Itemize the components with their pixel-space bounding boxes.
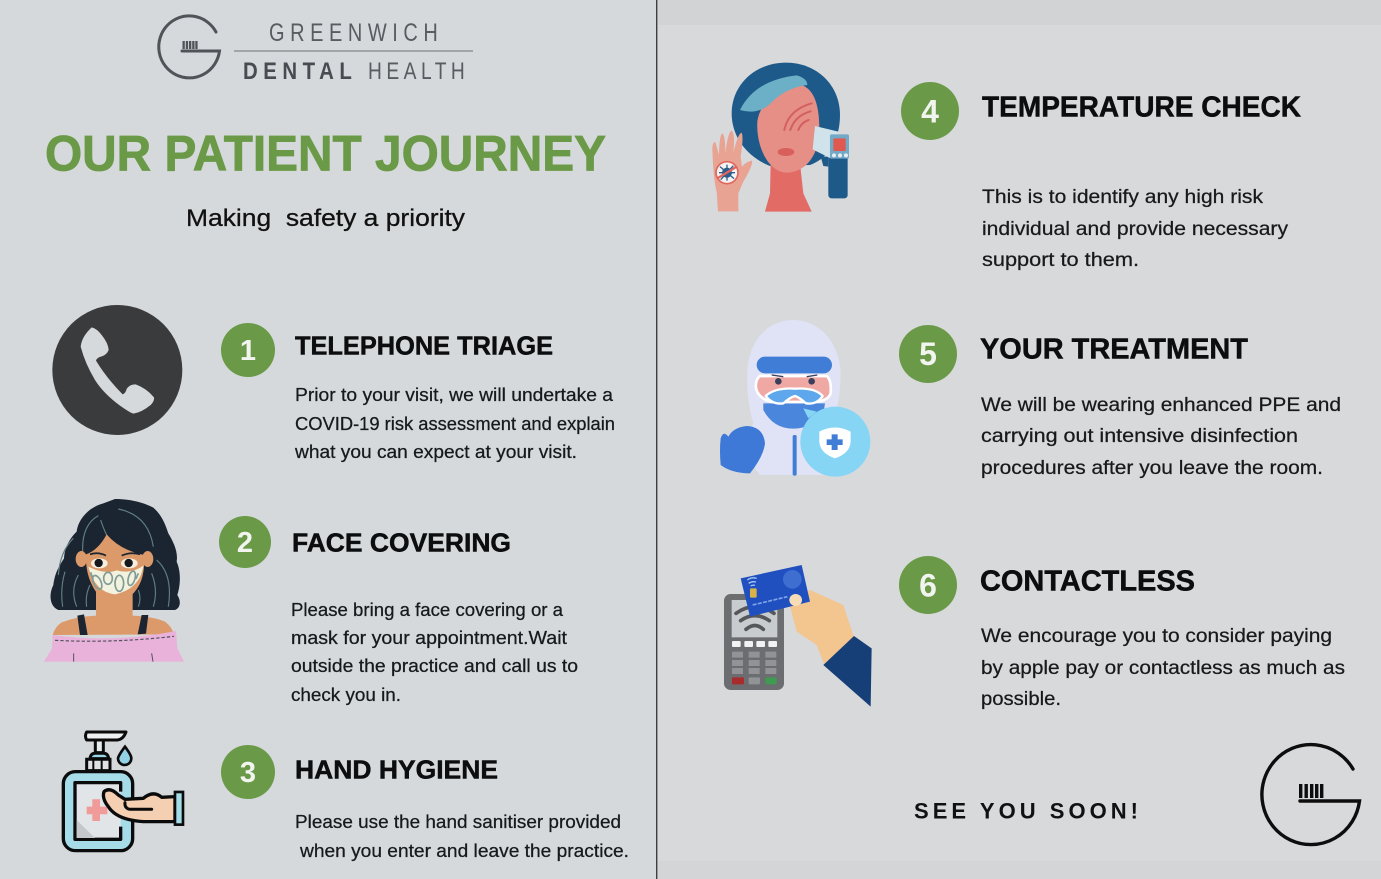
body text: COVID-19 risk assessment and explain <box>295 414 615 434</box>
title: OUR PATIENT JOURNEY <box>45 124 606 182</box>
body text: procedures after you leave the room. <box>981 457 1323 479</box>
icon: woman wearing a patterned mask <box>44 499 184 662</box>
number badge 5 <box>899 325 957 383</box>
number badge 6: 6 <box>919 568 937 604</box>
step 4: temperature check <box>712 63 1301 271</box>
logo: Greenwich Dental Health <box>159 16 473 85</box>
number badge 1 <box>221 323 275 377</box>
logo mark: G with toothbrush <box>1262 745 1360 845</box>
body text: check you in. <box>291 685 401 705</box>
step 5: your treatment <box>720 320 1341 479</box>
body text <box>981 394 1341 479</box>
body text: outside the practice and call us to <box>291 656 578 676</box>
heading: TEMPERATURE CHECK <box>982 92 1301 124</box>
sign-off message: SEE YOU SOON! <box>914 798 1138 824</box>
body text <box>291 600 578 705</box>
logo: Greenwich Dental Health: HEALTH <box>368 57 465 85</box>
heading: TELEPHONE TRIAGE <box>295 330 553 360</box>
body text: We will be wearing enhanced PPE and <box>981 394 1341 416</box>
icon: contactless card payment <box>724 565 872 707</box>
body text <box>295 812 629 861</box>
body text <box>294 385 615 462</box>
icon: clinician in PPE with shield <box>720 320 870 477</box>
body text <box>982 186 1288 271</box>
number badge 2 <box>219 516 271 568</box>
body text: possible. <box>981 688 1061 710</box>
panel: introduction and steps 1 to 3 <box>44 16 629 861</box>
logo: Greenwich Dental Health: GREENWICH <box>269 19 438 47</box>
number badge 4 <box>901 82 959 140</box>
body text: what you can expect at your visit. <box>294 442 577 462</box>
heading: HAND HYGIENE <box>295 754 498 784</box>
body text: when you enter and leave the practice. <box>299 841 629 861</box>
body text: individual and provide necessary <box>982 218 1288 240</box>
body text: We encourage you to consider paying <box>981 625 1332 647</box>
step 1: telephone triage <box>52 305 615 462</box>
number badge 3 <box>221 745 275 799</box>
body text: carrying out intensive disinfection <box>981 425 1298 447</box>
number badge 5: 5 <box>919 336 937 372</box>
body text <box>981 625 1345 710</box>
icon: telephone <box>52 305 182 435</box>
body text: mask for your appointment.Wait <box>291 628 567 648</box>
body text: by apple pay or contactless as much as <box>981 657 1345 679</box>
heading: CONTACTLESS <box>980 566 1195 598</box>
body text: Prior to your visit, we will undertake a <box>295 385 614 405</box>
logo: Greenwich Dental Health: DENTAL <box>243 57 352 84</box>
number badge 3: 3 <box>240 757 256 789</box>
body text: Please use the hand sanitiser provided <box>295 812 621 832</box>
step 6: contactless <box>724 556 1345 710</box>
number badge 6 <box>899 556 957 614</box>
icon: hand sanitiser bottle and hand <box>63 732 183 851</box>
step 2: face covering <box>44 499 578 705</box>
number badge 1: 1 <box>240 335 256 367</box>
panel: steps 4 to 6 and sign-off <box>712 63 1360 845</box>
subtitle: Making safety a priority <box>186 205 465 232</box>
icon: woman having temperature checked <box>712 63 849 212</box>
body text: This is to identify any high risk <box>982 186 1263 208</box>
step 3: hand hygiene <box>63 732 629 861</box>
number badge 4: 4 <box>921 94 939 130</box>
body text: Please bring a face covering or a <box>291 600 564 620</box>
body text: support to them. <box>982 249 1139 271</box>
number badge 2: 2 <box>237 527 253 559</box>
heading: YOUR TREATMENT <box>980 334 1248 366</box>
heading: FACE COVERING <box>292 528 511 558</box>
